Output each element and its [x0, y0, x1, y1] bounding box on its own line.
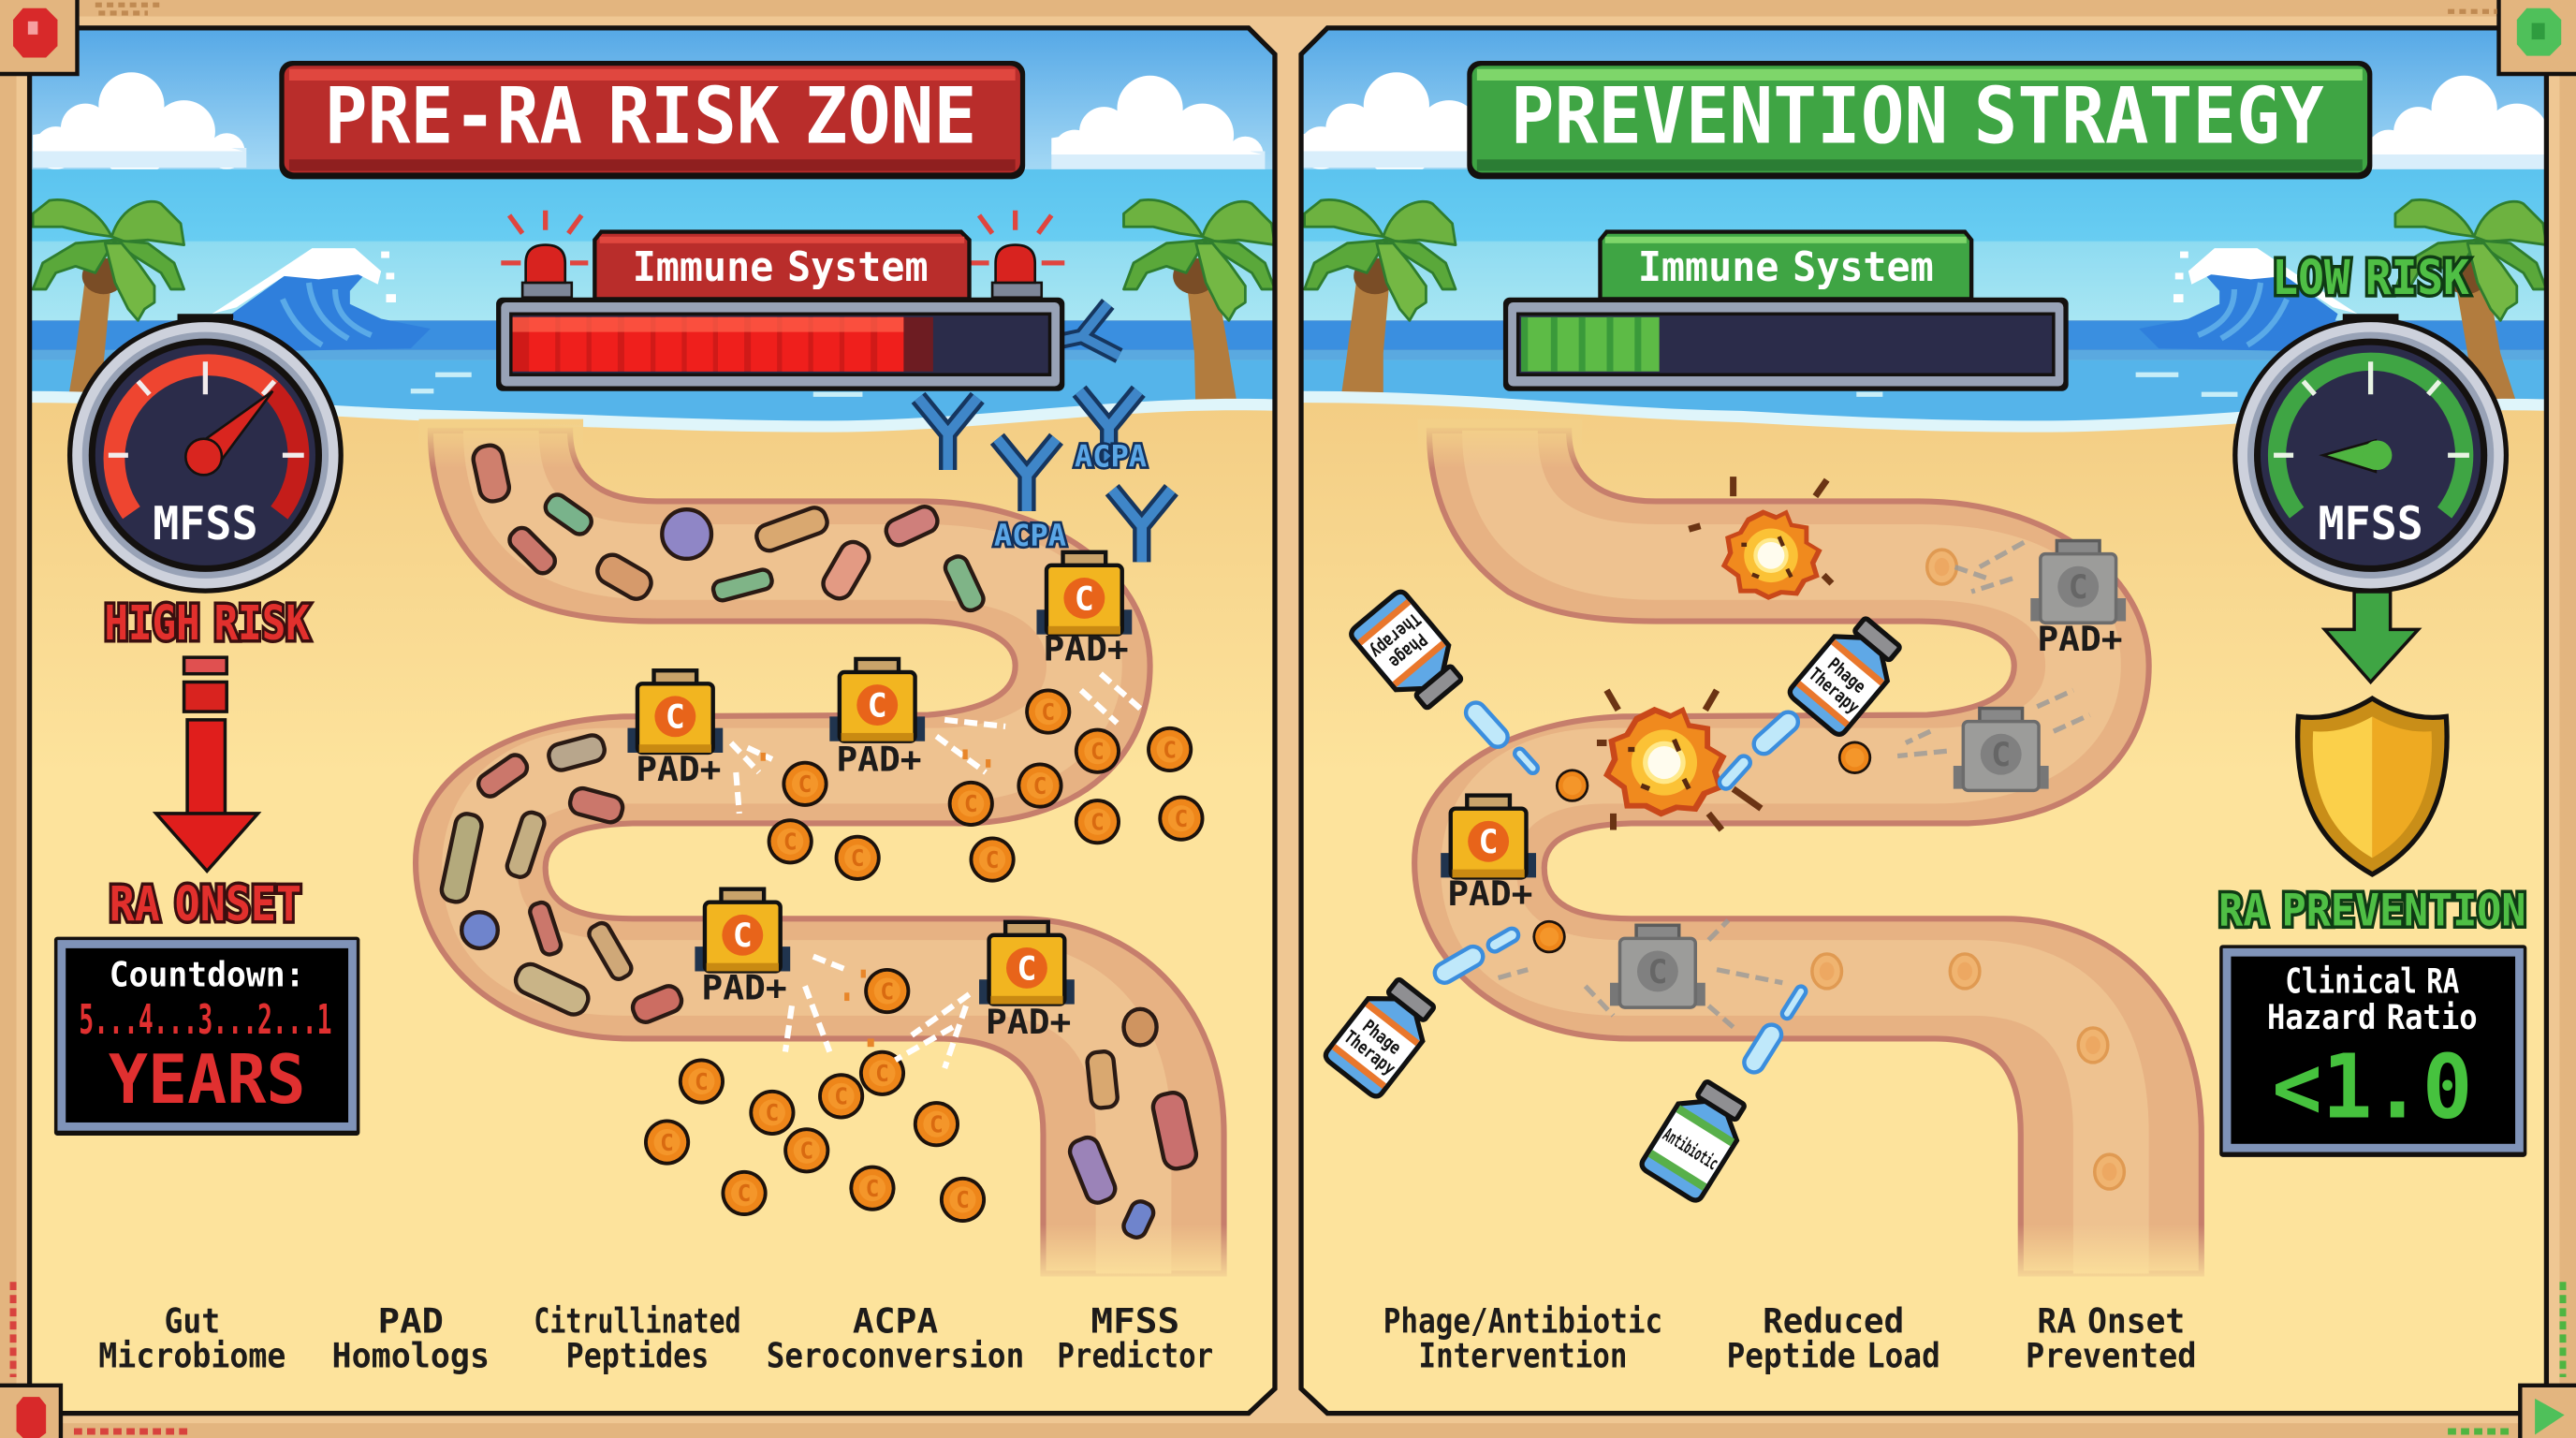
icon: palm tree left — [1303, 198, 1456, 393]
bottom stage labels: Seroconversion — [767, 1336, 1024, 1376]
gut path — [416, 419, 1232, 1282]
immune system meter: high — [496, 211, 1064, 391]
icon: antibiotic vial: Antibiotic — [1660, 1123, 1722, 1174]
icon: alarm siren right — [971, 211, 1064, 298]
citrullinated peptide coins: C — [798, 770, 812, 798]
ACPA antibodies: ACPA — [994, 520, 1066, 553]
ACPA antibodies: ACPA — [1075, 441, 1147, 475]
sky — [1298, 28, 2550, 172]
corner tile bottom-right with green arrow gem — [2520, 1386, 2576, 1438]
icon: shield — [2298, 698, 2447, 874]
high risk label: HIGH RISK — [104, 596, 310, 652]
panel: prevention strategy — [1298, 28, 2576, 1416]
citrullinated peptide coins: C — [1090, 738, 1105, 765]
citrullinated peptide coins: C — [956, 1186, 970, 1213]
bottom stage labels: Phage/Antibiotic — [1383, 1301, 1662, 1342]
bottom stage labels: RA Onset — [2037, 1301, 2185, 1342]
corner tile bottom-left with red gem — [0, 1386, 61, 1438]
explosions — [1597, 477, 1832, 829]
citrullinated peptide coins: C — [866, 1175, 879, 1202]
PAD+ robots: C — [1017, 949, 1037, 988]
icon: phage therapy vial 1: Phage — [1385, 629, 1431, 673]
PAD+ robots: C — [1075, 580, 1094, 618]
PAD+ labels: PAD+ — [836, 739, 922, 779]
citrullinated peptide coins: C — [1033, 772, 1046, 800]
icon: phage therapy vial 2 — [1788, 616, 1902, 737]
sea — [30, 169, 1278, 426]
enzyme sparks — [731, 674, 1142, 1068]
icon: phage therapy vial 2: Phage — [1823, 653, 1870, 697]
PAD robots: active and inactivated: C — [1647, 953, 1667, 991]
countdown display: 5...4...3...2...1 — [79, 996, 332, 1044]
PAD+ robots: C — [733, 917, 753, 955]
sky — [30, 28, 1278, 172]
PAD+ robots — [633, 552, 1127, 1005]
PAD+ labels — [1447, 619, 2123, 914]
gut bacteria — [440, 443, 1198, 1240]
citrullinated peptide coins: C — [986, 846, 999, 873]
immune system tab — [1600, 232, 1971, 299]
corner tile top-right with green gem — [2499, 0, 2576, 74]
bottom stage labels: Reduced — [1763, 1301, 1904, 1342]
arrow: green down to shield — [2324, 592, 2419, 682]
citrullinated peptide coins: C — [766, 1099, 779, 1126]
bottom stage labels — [98, 1301, 1213, 1376]
citrullinated peptide coins: C — [851, 844, 865, 872]
bottom stage labels: PAD — [378, 1301, 444, 1342]
citrullinated peptide coins: C — [695, 1068, 709, 1095]
hazard ratio display: Clinical RA — [2285, 961, 2459, 1001]
low risk label: LOW RISK — [2272, 251, 2469, 306]
countdown display: Countdown: — [110, 954, 305, 994]
clouds — [33, 72, 1266, 169]
PAD+ labels — [636, 629, 1129, 1042]
citrullinated peptide coins — [644, 689, 1204, 1223]
bottom stage labels: Homologs — [332, 1336, 490, 1376]
corner tile top-left with red gem — [0, 0, 77, 74]
PAD+ robots: C — [666, 698, 685, 737]
MFSS gauge: high risk: MFSS — [153, 496, 258, 550]
gut path — [1414, 419, 2210, 1282]
icon: phage therapy vial 3: Phage — [1358, 1016, 1405, 1059]
immune system tab: Immune System — [633, 243, 929, 291]
icon: alarm siren left — [501, 211, 588, 298]
citrullinated peptide coins: C — [834, 1083, 848, 1110]
inactive enzyme streaks — [1499, 542, 2089, 1027]
bottom stage labels: ACPA — [853, 1301, 938, 1342]
citrullinated peptide coins: C — [1175, 805, 1188, 832]
PAD robots: active and inactivated: C — [1479, 823, 1499, 861]
PAD+ labels: PAD+ — [986, 1002, 1071, 1042]
panel: pre-RA risk zone — [30, 28, 1278, 1416]
title: pre-RA risk zone: PRE-RA RISK ZONE — [325, 72, 976, 162]
MFSS gauge: low risk — [2232, 314, 2509, 594]
bottom stage labels: Prevented — [2026, 1336, 2197, 1376]
icon: ocean wave — [212, 248, 431, 352]
citrullinated peptide coins: C — [875, 1060, 889, 1087]
icon: phage therapy vial 3 — [1324, 977, 1436, 1099]
sand — [32, 391, 1273, 433]
MFSS gauge: low risk: MFSS — [2318, 496, 2423, 550]
immune system tab: Immune System — [1638, 243, 1934, 291]
bottom stage labels: Peptide Load — [1727, 1336, 1940, 1376]
reduced peptide coins — [1532, 550, 2124, 1189]
treatment droplets — [1431, 698, 1808, 1076]
PAD+ labels: PAD+ — [636, 749, 721, 789]
icon: ocean wave — [2139, 248, 2358, 352]
countdown display: YEARS — [109, 1040, 305, 1119]
sand — [1303, 391, 2544, 433]
RA onset label: RA ONSET — [110, 877, 301, 932]
PAD+ labels: PAD+ — [1447, 873, 1533, 914]
icon: phage therapy vial 3: Therapy — [1339, 1026, 1400, 1079]
bottom stage labels: Citrullinated — [534, 1301, 741, 1342]
bottom stage labels: Predictor — [1057, 1336, 1213, 1376]
immune system meter: low — [1503, 232, 2069, 391]
bottom stage labels: Peptides — [566, 1336, 709, 1376]
panel outline — [1301, 28, 2546, 1414]
icon: palm tree left — [33, 199, 184, 414]
RA prevention label: RA PREVENTION — [2218, 885, 2525, 936]
PAD+ labels: PAD+ — [2037, 619, 2123, 659]
PAD+ labels: PAD+ — [701, 967, 787, 1007]
PAD robots: active and inactivated — [1445, 541, 2121, 1007]
meter bar — [1503, 298, 2069, 391]
ACPA antibodies — [918, 303, 1171, 562]
icon: phage therapy vial 1: Therapy — [1366, 609, 1425, 663]
hazard ratio display: Hazard Ratio — [2267, 997, 2478, 1037]
bottom stage labels: MFSS — [1090, 1301, 1179, 1342]
PAD+ labels: PAD+ — [1043, 629, 1129, 669]
citrullinated peptide coins: C — [1163, 736, 1177, 763]
icon: palm tree right — [2394, 198, 2544, 399]
icon: phage therapy vial 1 — [1349, 590, 1464, 710]
countdown display — [54, 937, 359, 1136]
bottom stage labels: Microbiome — [98, 1336, 285, 1376]
arrow: red down to RA onset — [156, 657, 258, 871]
meter bar — [496, 298, 1064, 391]
citrullinated peptide coins: C — [783, 829, 798, 856]
PAD+ robots: C — [868, 686, 887, 725]
citrullinated peptide coins: C — [660, 1129, 674, 1156]
citrullinated peptide coins: C — [799, 1137, 813, 1165]
bottom stage labels: Gut — [165, 1301, 220, 1342]
panel outline — [30, 28, 1275, 1414]
hazard ratio display: <1.0 — [2272, 1036, 2472, 1139]
clouds — [1303, 72, 2544, 169]
citrullinated peptide coins: C — [738, 1180, 751, 1207]
PAD robots: active and inactivated: C — [1991, 736, 2011, 774]
bottom stage labels — [1383, 1301, 2197, 1376]
PAD robots: active and inactivated: C — [2069, 568, 2088, 607]
icon: palm tree right — [1122, 198, 1273, 400]
citrullinated peptide coins: C — [1090, 808, 1105, 835]
MFSS gauge: high risk — [67, 314, 344, 594]
citrullinated peptide coins: C — [880, 977, 894, 1005]
citrullinated peptide coins: C — [1041, 698, 1055, 726]
hazard ratio display — [2219, 945, 2526, 1157]
title: prevention strategy: PREVENTION STRATEGY — [1511, 72, 2324, 162]
sea — [1298, 169, 2550, 426]
icon: antibiotic vial — [1640, 1079, 1747, 1203]
citrullinated peptide coins: C — [929, 1110, 944, 1137]
immune system tab — [594, 232, 970, 299]
citrullinated peptide coins: C — [964, 790, 978, 817]
icon: phage therapy vial 2: Therapy — [1805, 663, 1864, 718]
bottom stage labels: Intervention — [1419, 1336, 1627, 1376]
